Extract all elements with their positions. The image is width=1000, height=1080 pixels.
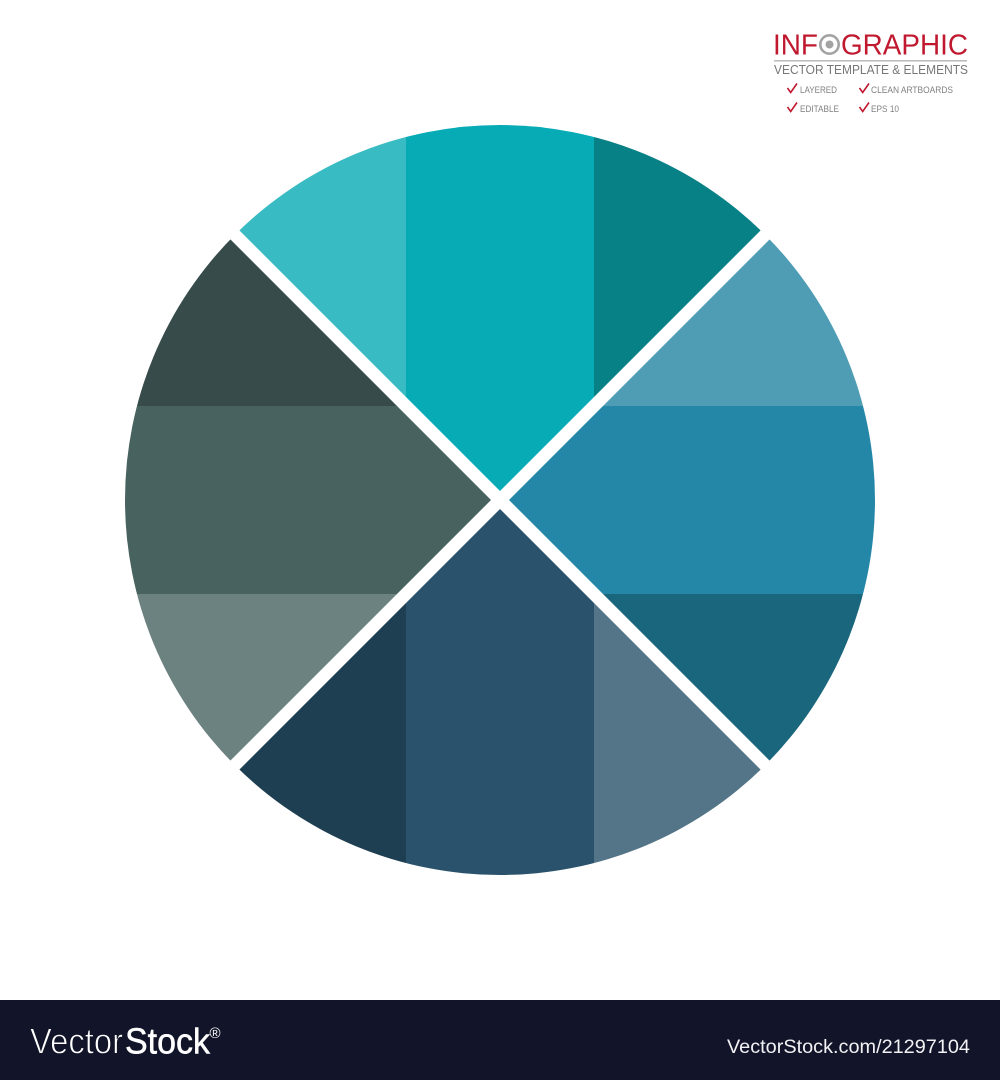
- checklist item: eps 10: [860, 102, 899, 115]
- panel: bottom segment: [240, 509, 761, 875]
- checklist item: clean artboards: CLEAN ARTBOARDS: [871, 85, 953, 96]
- footer logo: VectorStock: ®: [210, 1025, 221, 1042]
- checklist item: editable: EDITABLE: [800, 104, 839, 115]
- subheading: VECTOR TEMPLATE & ELEMENTS: [774, 62, 968, 77]
- panel: right segment: [509, 240, 875, 760]
- heading: GRAPHIC: GRAPHIC: [841, 30, 968, 62]
- footer logo: VectorStock: [30, 1020, 221, 1062]
- footer url: VectorStock.com/21297104: [727, 1036, 970, 1058]
- footer bar: [0, 1000, 1000, 1080]
- logo: infographic badge: [773, 30, 968, 115]
- footer logo: VectorStock: Vector: [30, 1020, 123, 1062]
- icon: target letter O: [820, 35, 839, 54]
- checklist item: editable: [788, 102, 839, 115]
- checklist item: eps 10: EPS 10: [871, 104, 899, 115]
- circle chart: [125, 125, 875, 875]
- checklist item: layered: [788, 84, 837, 96]
- panel: left segment: [125, 240, 491, 760]
- checklist item: layered: LAYERED: [800, 85, 837, 96]
- footer logo: VectorStock: Stock: [125, 1020, 211, 1062]
- heading: INF: INF: [773, 30, 818, 62]
- panel: top segment: [240, 125, 761, 491]
